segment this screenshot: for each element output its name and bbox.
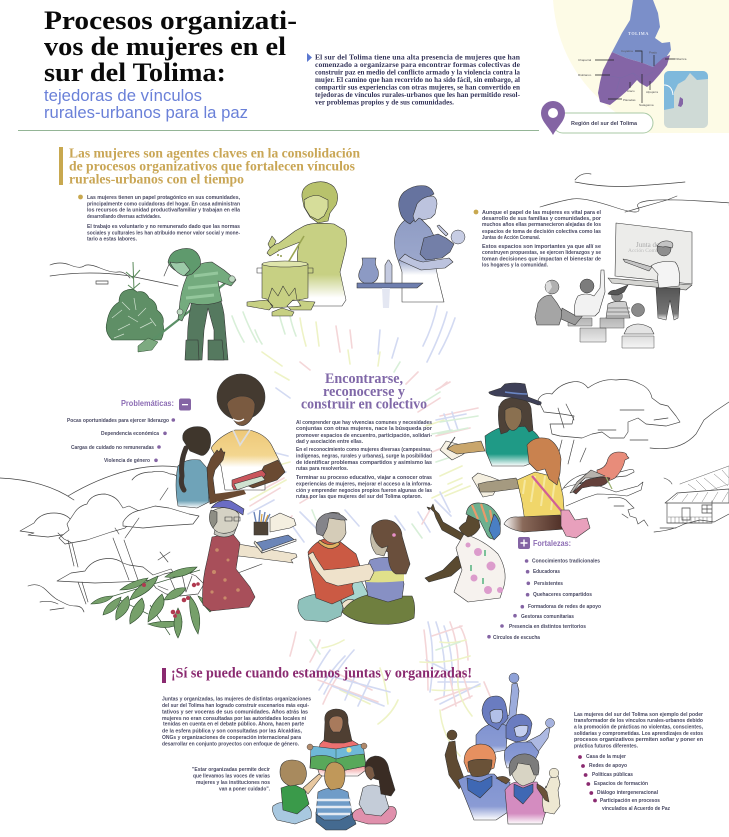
fortalezas list: Conocimientos tradicionales: [532, 558, 600, 564]
section heading: yes we can: ¡Sí se puede cuando estamos juntas y organizadas!: [171, 666, 472, 682]
problems list: Pocas oportunidades para ejercer liderazgo: [67, 418, 170, 424]
text block and list: transforming power: práctica futuros diferentes.: [574, 743, 638, 749]
green divider with location pin and label: [18, 101, 653, 135]
center text block: Terminar su proceso educativo, viajar a conocer otras: [296, 475, 432, 481]
text block and list: transforming power: solidarias y comprometidas. Los aprendizajes de estos: [574, 731, 703, 737]
text block: decision spaces: desarrollo de sus familias y comunidades, por: [482, 216, 601, 222]
text block and list: transforming power: a la promoción de prácticas no violentas, conscientes,: [574, 724, 703, 730]
intro text: comenzado a organizarse para encontrar formas colectivas de: [315, 60, 521, 69]
text block: decision spaces: Estos espacios son importantes ya que allí se: [482, 244, 601, 250]
text block and list: transforming power: Participación en procesos: [600, 798, 660, 804]
map background and Tolima map: Ataco: [627, 89, 635, 93]
illustration: girl with braid: [176, 427, 246, 508]
fortalezas list: Quehaceres compartidos: [533, 592, 592, 598]
text block: organized women: del sur del Tolima han logrado construir escenarios más equi-: [162, 703, 309, 709]
text block and list: transforming power: Diálogo intergeneracional: [597, 790, 658, 796]
fortalezas list: Gestoras comunitarias: [521, 614, 574, 620]
illustration: woman with hat writing: [440, 383, 543, 466]
illustration: woman with shovel: [138, 248, 236, 360]
text block: decision spaces: [474, 174, 729, 269]
text block: organized women: desarrollar en conjunto proyectos con enfoque de género.: [162, 742, 299, 748]
fortalezas list: Círculos de escucha: [493, 635, 540, 641]
section heading: women as key agents: de procesos organizativos que fortalecen vínculos: [69, 158, 355, 174]
intro text: [307, 52, 521, 106]
intro text: tejedoras de vínculos rurales-urbanos que les han permitido resol-: [315, 90, 520, 99]
problems list: Problemáticas:: [121, 399, 174, 408]
intro text: El sur del Tolima tiene una alta presencia de mujeres que han: [315, 52, 521, 62]
intro text: ver problemas propios y de sus comunidades.: [315, 97, 454, 106]
title: Procesos organizati-: [44, 5, 297, 35]
section heading: women as key agents: [59, 146, 360, 186]
green divider with location pin and label: Región del sur del Tolima: [571, 121, 638, 127]
problems list: [67, 398, 191, 464]
text block: decision spaces: espacios de toma de decisión colectiva como las: [482, 229, 601, 235]
title: rurales-urbanos para la paz: [44, 103, 248, 122]
text block: decision spaces: construyen propuestas, se ejercen liderazgos y se: [482, 250, 601, 256]
quote: que llevamos las voces de varias: [193, 773, 270, 779]
text block: organized women: de la esfera pública y son consultadas por las Alcaldías,: [162, 728, 303, 734]
fortalezas list: [487, 537, 602, 641]
illustration: older woman embracing girl: [298, 512, 415, 624]
map background and Tolima map: Planadas: [623, 98, 636, 102]
text block and list: transforming power: transformador de los vínculos rurales-urbanos debido: [574, 718, 704, 724]
illustration: teacher at chalkboard with students: Junta de: [636, 241, 659, 249]
illustration: teacher at chalkboard with students: [535, 223, 692, 348]
illustration: teacher at chalkboard with students: Acción Comunal: [628, 248, 666, 254]
text block: women's role: [78, 195, 240, 243]
text block and list: transforming power: Espacios de formación: [594, 781, 648, 787]
map background and Tolima map: Prado: [649, 50, 657, 54]
center heading: Encontrarse,: [325, 371, 403, 387]
center text block: conjuntas con otras mujeres, nace la búsqueda por: [296, 426, 432, 432]
text block: women's role: principalmente como cuidadoras del hogar. En casa administran: [87, 201, 240, 207]
fortalezas list: Fortalezas:: [533, 539, 571, 548]
intro text: compartir sus experiencias con otras mujeres, se han convertido en: [315, 82, 521, 91]
title: sur del Tolima:: [44, 57, 226, 87]
center text block: [296, 420, 432, 500]
center text block: rutas por las que mujeres del sur del Tolima optaron.: [296, 494, 422, 500]
decorative woven threads: [232, 306, 490, 756]
section heading: women as key agents: rurales-urbanos con el tiempo: [69, 172, 244, 186]
quote: "Estar organizadas permite decir: [192, 767, 270, 773]
illustration: woman with afro and book: [211, 374, 285, 490]
illustration: coffee branch: [91, 567, 212, 638]
text block: women's role: El trabajo es voluntario y no remunerado dado que las normas: [87, 224, 240, 230]
intro text: mujer. El camino que han recorrido no ha sido fácil, sin embargo, al: [315, 75, 520, 84]
illustration: mother with baby and table: [357, 186, 465, 308]
map background and Tolima map: Villarrica: [675, 57, 687, 61]
text block and list: transforming power: [574, 712, 704, 812]
quote: mujeres y las instituciones nos: [196, 780, 270, 786]
text block: women's role: sociales y culturales les han atribuido menor valor social y mone-: [87, 230, 240, 236]
text block: women's role: los recursos de la unidad productiva/familiar y trabajan en ella: [87, 208, 240, 214]
text block and list: transforming power: Redes de apoyo: [589, 763, 628, 769]
text block: women's role: Las mujeres tienen un papel protagónico en sus comunidades,: [87, 195, 240, 201]
center heading: reconocerse y: [323, 384, 405, 400]
text block and list: transforming power: procesos organizativos permiten soñar y poner en: [574, 737, 703, 743]
quote: van a poner cuidado".: [219, 786, 270, 792]
text block: organized women: Juntas y organizadas, las mujeres de distintas organizaciones: [162, 697, 311, 703]
map background and Tolima map: Rioblanco: [578, 73, 592, 77]
fortalezas list: Persistentes: [534, 581, 563, 587]
illustration: books and pencils: [254, 510, 296, 553]
text block and list: transforming power: Las mujeres del sur del Tolima son ejemplo del poder: [574, 712, 703, 718]
center text block: ción y emprender negocios propios fueron algunas de las: [296, 488, 432, 494]
map background and Tolima map: Chaparral: [578, 58, 592, 62]
title: tejedoras de vínculos: [44, 86, 202, 105]
center text block: promover espacios de encuentro, participación, solidari-: [296, 433, 432, 439]
center text block: rutas para resolverlos.: [296, 466, 348, 472]
map background and Tolima map: Alpujarra: [646, 90, 658, 94]
illustration: woman reading to children: [272, 709, 396, 830]
text block and list: transforming power: Políticas públicas: [592, 772, 633, 778]
fortalezas list: Presencia en distintos territorios: [509, 624, 586, 630]
inset map of Colombia: [664, 71, 708, 128]
illustration: forest outline: [0, 466, 262, 612]
text block: organized women: tativos y ser voceras de sus comunidades. Años atrás las: [162, 710, 308, 716]
fortalezas list: Formadoras de redes de apoyo: [528, 604, 602, 610]
text block: organized women: mujeres no eran consultadas por las autoridades locales ni: [162, 716, 307, 722]
center heading: [301, 371, 427, 412]
illustration: woman with turban: [425, 503, 505, 602]
illustration: woman with beret pointing: [202, 500, 297, 611]
text block: women's role: desarrollando diversas actividades.: [87, 214, 161, 220]
text block: organized women: tenidas en cuenta en el debate público. Ahora, hacen parte: [163, 722, 304, 728]
map background and Tolima map: Natagaima: [639, 103, 654, 107]
illustration: forest, bird and house on the right: [538, 380, 729, 532]
illustration: women with raised fists: [445, 673, 560, 824]
text block: decision spaces: Aunque el papel de las mujeres es vital para el: [482, 210, 602, 216]
text block: organized women: ONGs y organizaciones de cooperación internacional para: [162, 735, 301, 741]
text block: decision spaces: Juntas de Acción Comunal.: [482, 235, 540, 241]
fortalezas list: Educadoras: [533, 569, 560, 575]
center text block: Al comprender que hay vivencias comunes y necesidades: [296, 420, 432, 426]
center text block: indígenas, negras, rurales y urbanas), surge la posibilidad: [296, 454, 432, 460]
illustration: bird on branch: [564, 452, 643, 506]
problems list: Cargas de cuidado no remuneradas: [71, 445, 154, 451]
intro text: construir paz en medio del conflicto armado y la violencia contra la: [315, 67, 520, 76]
illustration: woman with red hair and bag: [472, 438, 590, 538]
text block: decision spaces: toman decisiones que impactan el bienestar de: [482, 256, 601, 262]
text block: decision spaces: los hogares y la comunidad.: [482, 263, 548, 269]
center text block: experiencias de mujeres, mejorar el acceso a la informa-: [296, 482, 432, 488]
illustration: woman cooking: [247, 182, 347, 316]
problems list: Dependencia económica: [101, 431, 159, 437]
illustration: landscape and plant: [50, 262, 178, 340]
center heading: construir en colectivo: [301, 396, 427, 412]
text block: decision spaces: muchos años ellas permanecieron alejadas de los: [482, 222, 601, 228]
center text block: dad y asociación entre ellas.: [296, 439, 363, 445]
center text block: En el reconocimiento como mujeres diversas (campesinas,: [296, 447, 432, 453]
center text block: de identificar problemas compartidos y asimismo las: [296, 460, 432, 466]
map background and Tolima map: [553, 0, 729, 133]
text block and list: transforming power: vinculados al Acuerdo de Paz: [602, 806, 670, 812]
map background and Tolima map: Coyaima: [621, 49, 633, 53]
title: [44, 5, 297, 122]
problems list: Violencia de género: [104, 458, 151, 464]
text block: organized women: [162, 697, 311, 748]
title: vos de mujeres en el: [44, 31, 286, 61]
text block: women's role: tario a estas labores.: [87, 237, 137, 243]
quote: [192, 767, 270, 792]
text block and list: transforming power: Casa de la mujer: [586, 754, 626, 760]
section heading: women as key agents: Las mujeres son agentes claves en la consolidación: [69, 146, 360, 160]
map background and Tolima map: TOLIMA: [628, 31, 649, 36]
